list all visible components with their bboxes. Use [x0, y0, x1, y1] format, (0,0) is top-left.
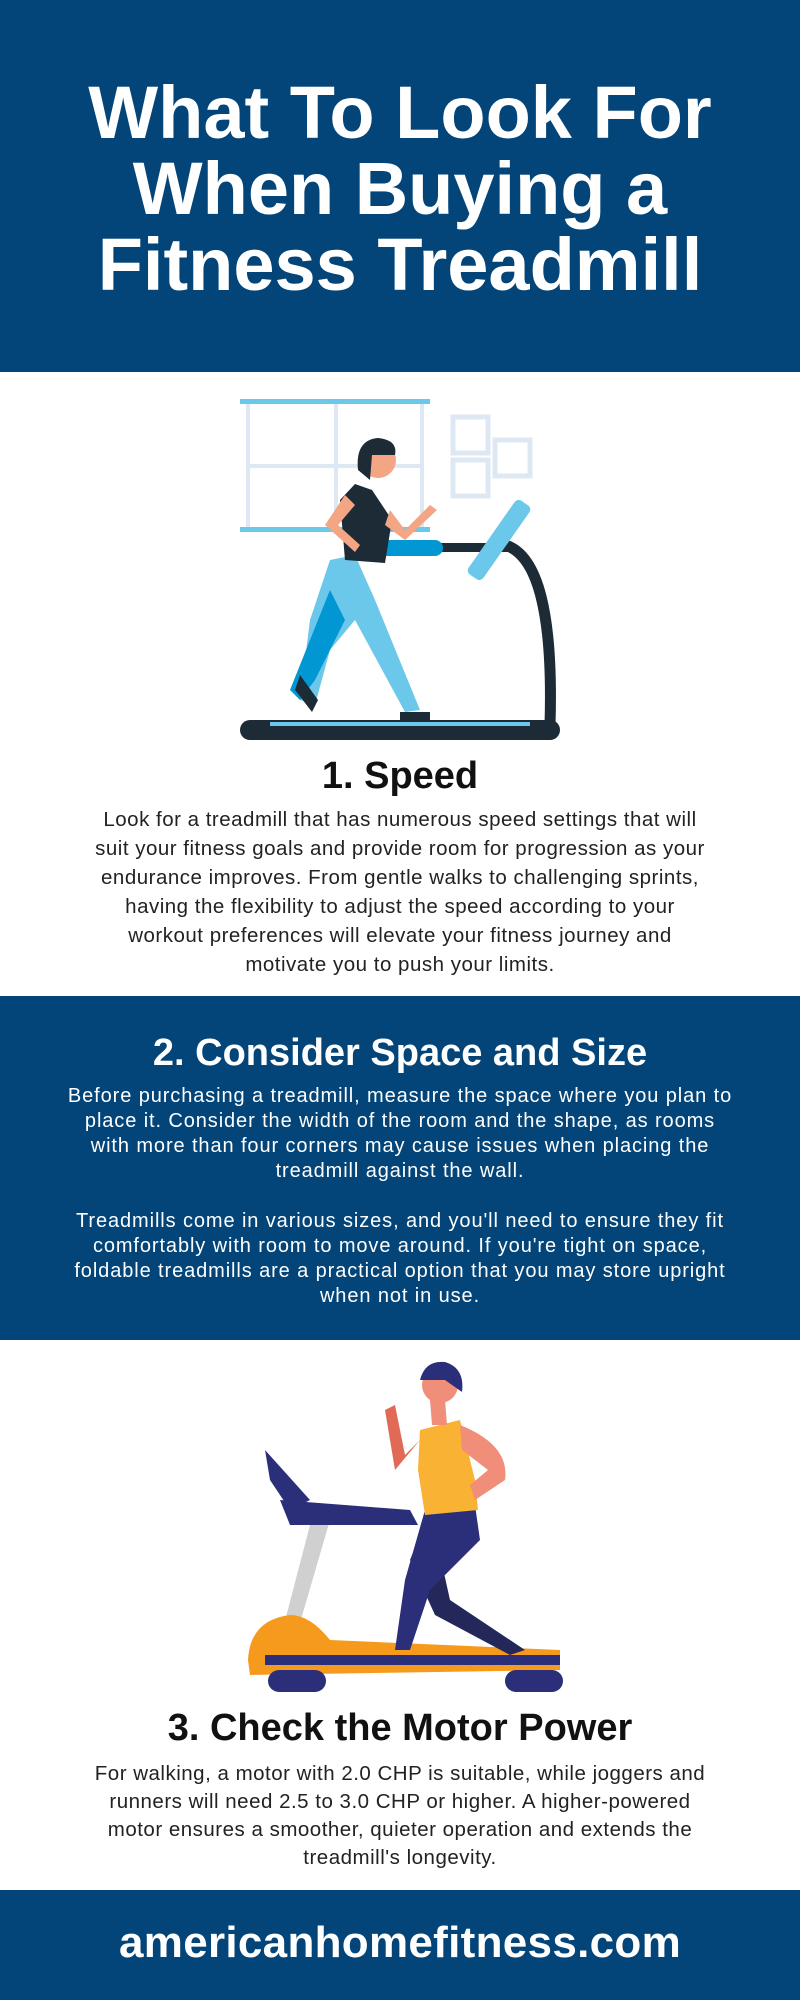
section 2 text: with more than four corners may cause issues when placing the	[91, 1135, 709, 1157]
section 2 text: when not in use.	[320, 1285, 480, 1307]
section 2 text: foldable treadmills are a practical option that you may store upright	[74, 1260, 726, 1282]
section 3 text	[95, 1762, 705, 1869]
title: Fitness Treadmill	[98, 223, 702, 306]
title: What To Look For	[88, 71, 712, 154]
section 1 text: endurance improves. From gentle walks to challenging sprints,	[101, 866, 699, 889]
section 3 text: treadmill's longevity.	[303, 1846, 497, 1869]
title	[88, 71, 712, 306]
section 1 text: having the flexibility to adjust the speed according to your	[125, 895, 675, 918]
section 1 text: workout preferences will elevate your fitness journey and	[128, 924, 672, 947]
title: When Buying a	[133, 147, 667, 230]
header panel	[0, 0, 800, 372]
section 3 text: For walking, a motor with 2.0 CHP is suitable, while joggers and	[95, 1762, 705, 1785]
section 3 text: runners will need 2.5 to 3.0 CHP or higher. A higher-powered	[109, 1790, 691, 1813]
section 3 heading: 3. Check the Motor Power	[168, 1707, 632, 1749]
illustration: man running on treadmill	[248, 1362, 563, 1692]
section 1 text: suit your fitness goals and provide room for progression as your	[95, 837, 705, 860]
footer	[0, 1890, 800, 2000]
section 2 text: Treadmills come in various sizes, and you'll need to ensure they fit	[76, 1210, 724, 1232]
illustration: woman running on treadmill	[240, 399, 560, 740]
section 1 text	[95, 808, 705, 976]
section 2 text	[68, 1085, 732, 1307]
section 2 text: treadmill against the wall.	[276, 1160, 524, 1182]
section 2 text: place it. Consider the width of the room and the shape, as rooms	[85, 1110, 715, 1132]
footer url: americanhomefitness.com	[119, 1918, 681, 1967]
section 3 text: motor ensures a smoother, quieter operation and extends the	[108, 1818, 692, 1841]
section 1 heading: 1. Speed	[322, 755, 478, 797]
section 1 text: motivate you to push your limits.	[245, 953, 555, 976]
section 1 text: Look for a treadmill that has numerous speed settings that will	[103, 808, 697, 831]
panel: space and size	[0, 996, 800, 1340]
section 2 text: comfortably with room to move around. If you're tight on space,	[93, 1235, 707, 1257]
section 2 text: Before purchasing a treadmill, measure the space where you plan to	[68, 1085, 732, 1107]
section 2 heading: 2. Consider Space and Size	[153, 1032, 647, 1074]
